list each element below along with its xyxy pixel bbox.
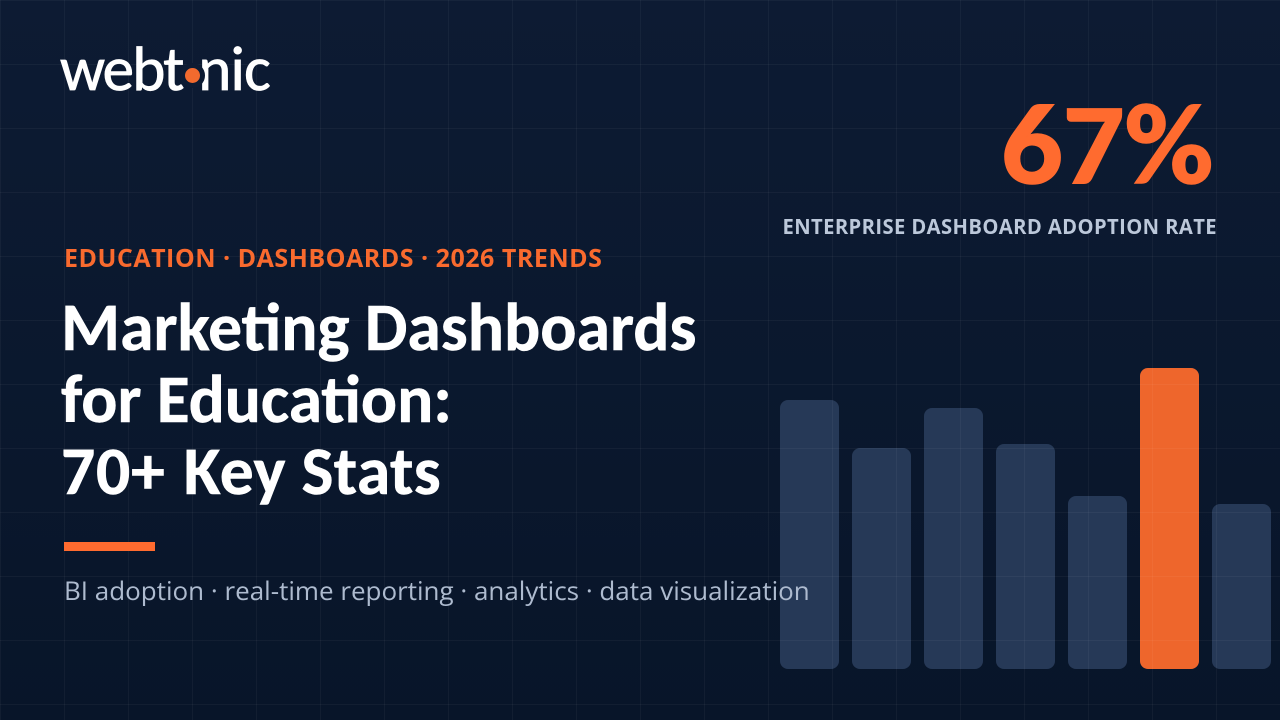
bar 6 highlighted [1140, 368, 1199, 669]
eyebrow: EDUCATION · DASHBOARDS · 2026 TRENDS [64, 241, 602, 275]
logo: webt [60, 30, 183, 107]
title: 70+ Key Stats [61, 431, 441, 513]
bar 5 [1068, 496, 1127, 669]
title: for Education: [61, 359, 452, 441]
bar 3 [924, 408, 983, 669]
bar 4 [996, 444, 1055, 669]
bar 7 [1212, 504, 1271, 669]
logo [60, 30, 270, 107]
big stat: 67% [1001, 74, 1213, 214]
subtitle: BI adoption · real-time reporting · analytics · data visualization [64, 572, 810, 608]
stat caption: ENTERPRISE DASHBOARD ADOPTION RATE [783, 212, 1217, 240]
accent rule [64, 542, 155, 551]
bar chart [780, 368, 1271, 669]
bar 1 [780, 400, 839, 669]
title [61, 287, 696, 513]
bar 2 [852, 448, 911, 669]
logo: nic [198, 30, 270, 107]
title: Marketing Dashboards [61, 287, 696, 369]
